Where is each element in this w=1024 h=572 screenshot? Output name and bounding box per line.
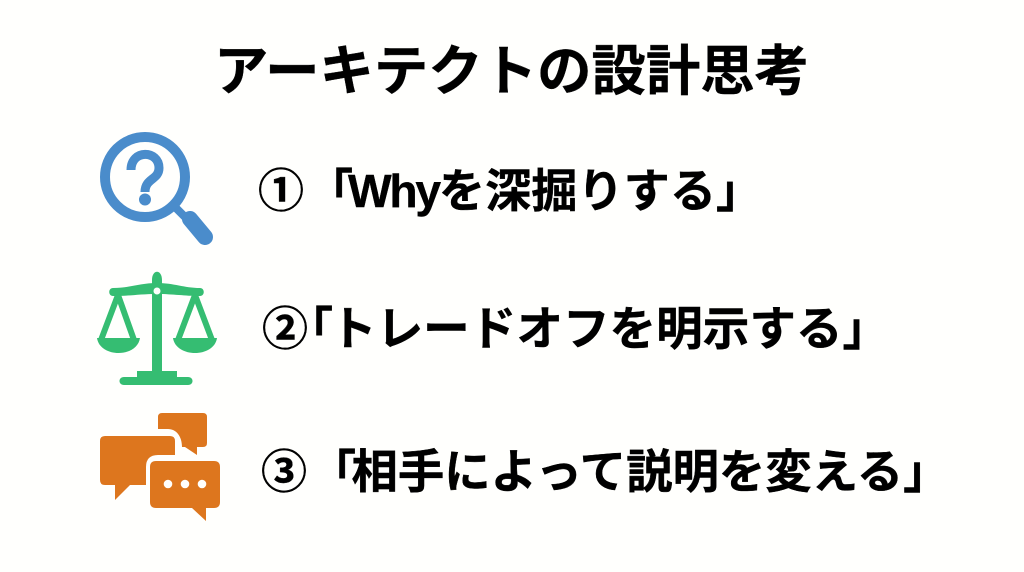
item 2 text: トレードオフを明示する」 bbox=[330, 303, 889, 355]
icon: speech bubbles bbox=[100, 413, 220, 521]
item 2 text: ② bbox=[262, 303, 308, 355]
item 3 text: ③ bbox=[261, 446, 307, 498]
icon: magnifying glass with question mark bbox=[100, 132, 213, 245]
item 1 text: 「 bbox=[307, 165, 353, 217]
item 1 text: Whyを深掘りする」 bbox=[348, 165, 762, 217]
item 3 text: 「 bbox=[310, 446, 356, 498]
item 1 text: ① bbox=[258, 165, 304, 217]
icon: balance scale bbox=[97, 272, 217, 385]
item 3 text: 相手によって説明を変える」 bbox=[352, 446, 949, 498]
item 2 text: 「 bbox=[287, 303, 333, 355]
title: アーキテクトの設計思考 bbox=[214, 41, 809, 102]
